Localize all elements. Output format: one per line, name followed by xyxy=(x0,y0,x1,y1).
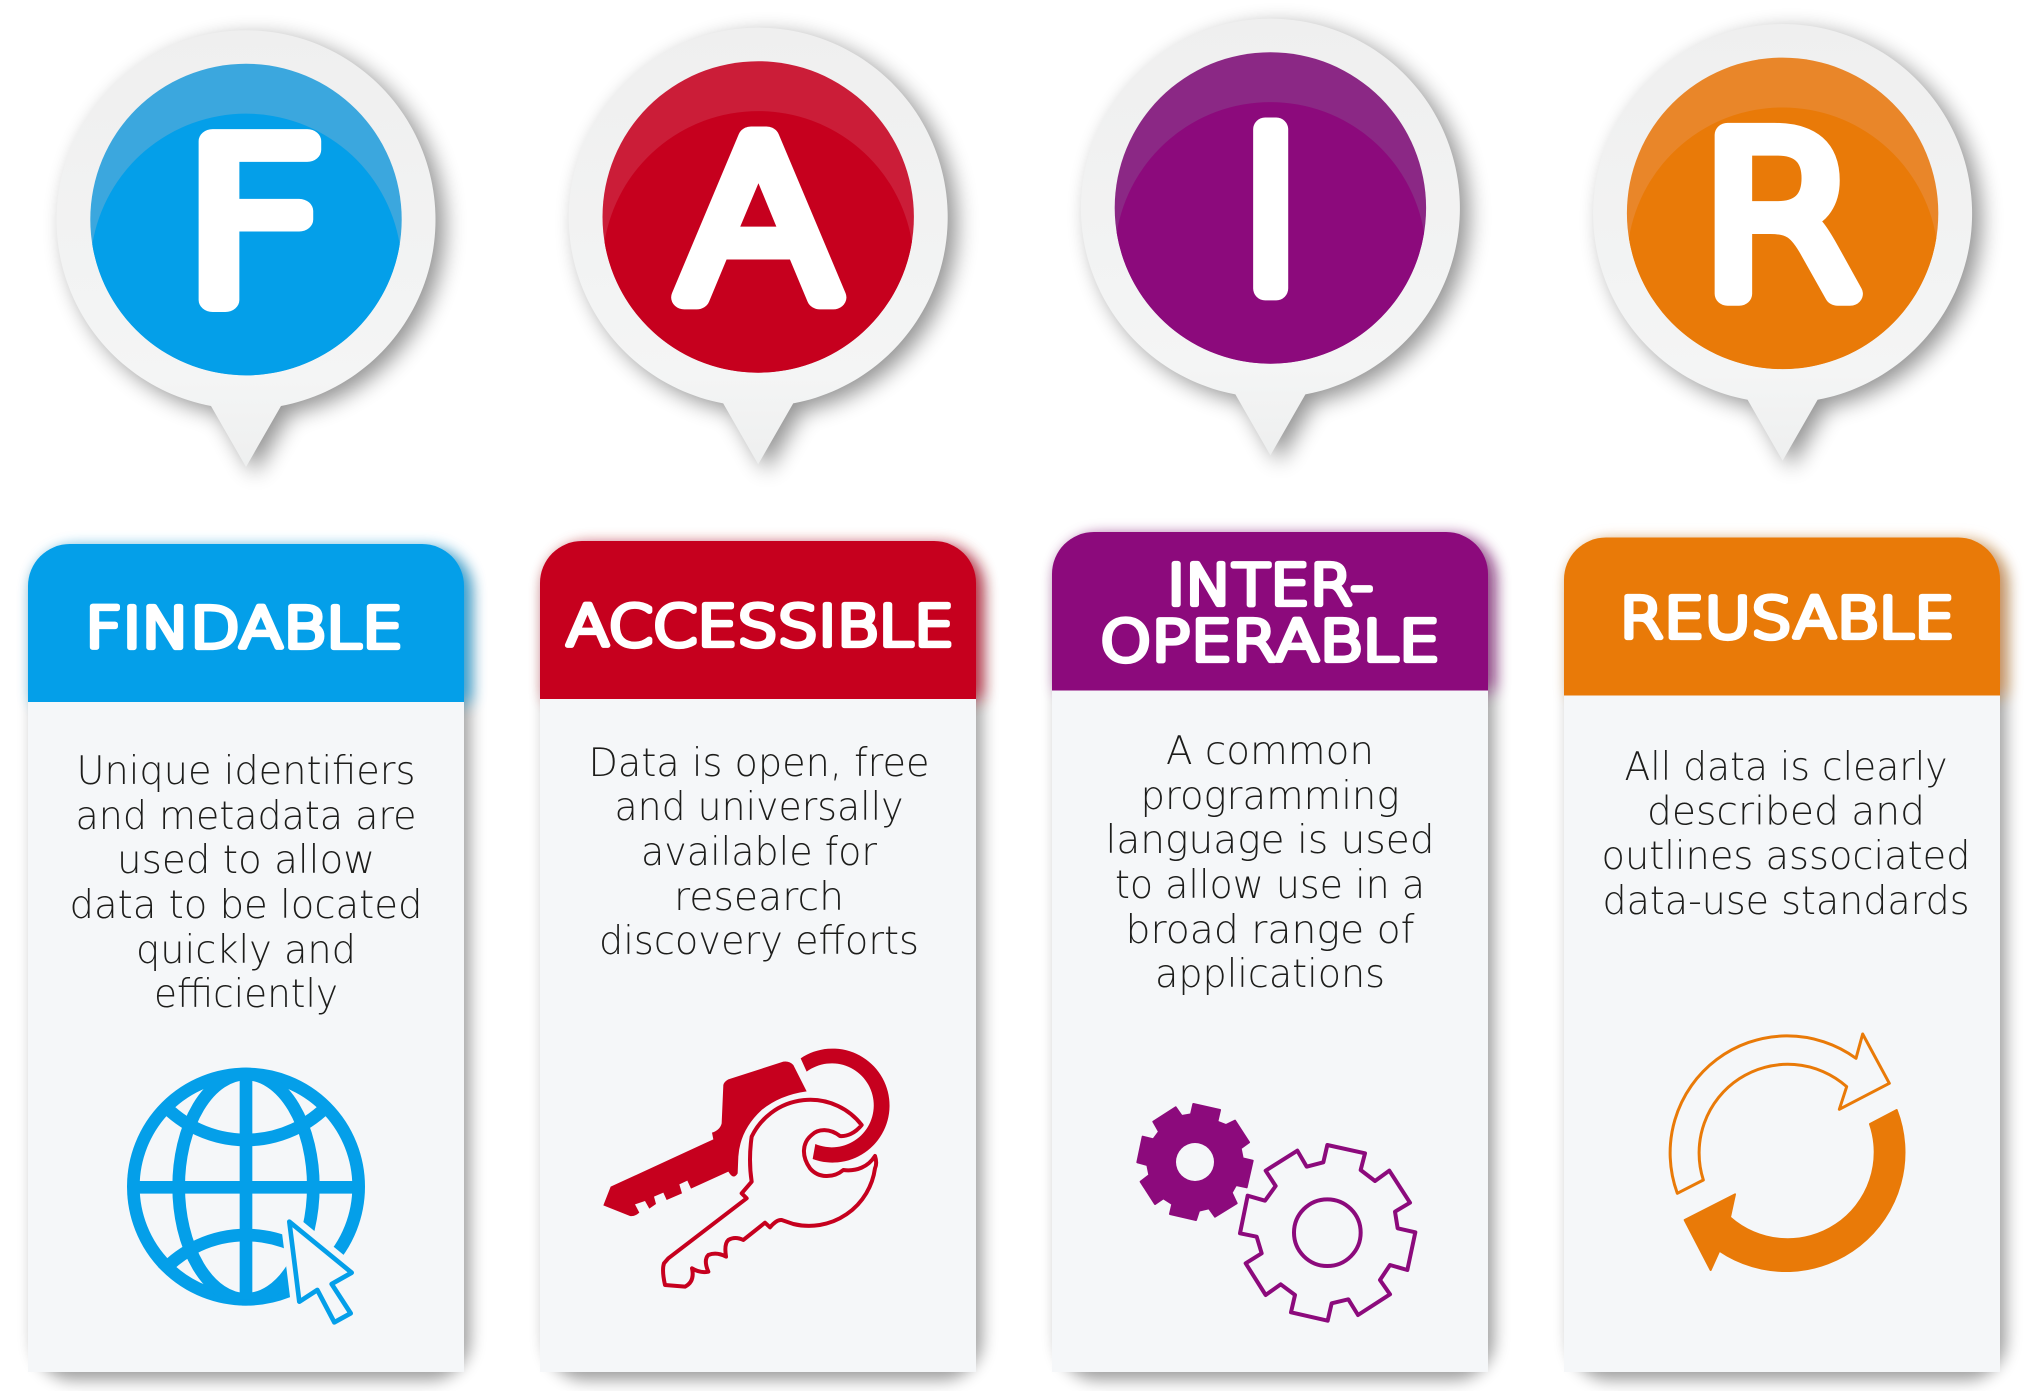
text: findable: efficiently xyxy=(154,972,338,1017)
text: accessible: and universally xyxy=(614,785,904,830)
text: interoperable xyxy=(1106,729,1434,997)
text: findable xyxy=(70,749,422,1017)
text: interoperable: broad range of xyxy=(1126,908,1415,953)
letter F: F xyxy=(182,99,328,352)
heading: interoperable xyxy=(1100,553,1440,674)
text: reusable: data-use standards xyxy=(1602,879,1970,924)
text: findable: used to allow xyxy=(117,838,375,883)
header: interoperable xyxy=(1052,532,1488,690)
text: accessible: available for xyxy=(641,830,877,875)
text: accessible: research xyxy=(674,875,844,920)
header: reusable xyxy=(1564,538,2000,696)
letter A: A xyxy=(677,96,841,349)
text: accessible: Data is open, free xyxy=(588,741,930,786)
text: interoperable: to allow use in a xyxy=(1115,863,1425,908)
heading: accessible: ACCESSIBLE xyxy=(566,595,954,660)
icon: globe with cursor xyxy=(133,1074,359,1322)
text: findable: data to be located xyxy=(70,883,422,928)
icon: gears xyxy=(1137,1104,1415,1321)
heading: interoperable: INTER- xyxy=(1167,553,1373,618)
bubble: I xyxy=(1081,19,1469,462)
icon: keys xyxy=(603,1049,890,1287)
text: accessible: discovery efforts xyxy=(599,919,919,964)
bubble: R xyxy=(1593,24,1981,468)
panel: accessible xyxy=(540,541,982,1380)
icon: circular arrows xyxy=(1670,1034,1904,1271)
panel: findable xyxy=(28,544,470,1380)
text: interoperable: language is used xyxy=(1106,818,1434,863)
bubble: F xyxy=(57,30,445,474)
text: reusable: described and xyxy=(1647,790,1925,834)
text: findable: and metadata are xyxy=(76,794,416,839)
heading: findable: FINDABLE xyxy=(85,596,403,661)
panel: reusable xyxy=(1564,538,2006,1380)
letter I: I xyxy=(1239,87,1303,340)
header: findable xyxy=(28,544,464,702)
heading: interoperable: OPERABLE xyxy=(1100,609,1440,674)
text: interoperable: applications xyxy=(1155,952,1385,997)
heading: reusable: REUSABLE xyxy=(1620,586,1954,651)
text: interoperable: A common xyxy=(1166,729,1374,774)
text: interoperable: programming xyxy=(1140,774,1400,819)
header: accessible xyxy=(540,541,976,699)
text: accessible xyxy=(588,741,930,964)
text: reusable: All data is clearly xyxy=(1624,745,1948,790)
text: reusable: outlines associated xyxy=(1602,834,1970,879)
text: findable: quickly and xyxy=(136,928,356,973)
text: findable: Unique identifiers xyxy=(76,749,416,794)
panel: interoperable xyxy=(1052,532,1494,1380)
bubble: A xyxy=(569,28,957,471)
letter R: R xyxy=(1699,93,1863,346)
text: reusable xyxy=(1602,745,1970,924)
